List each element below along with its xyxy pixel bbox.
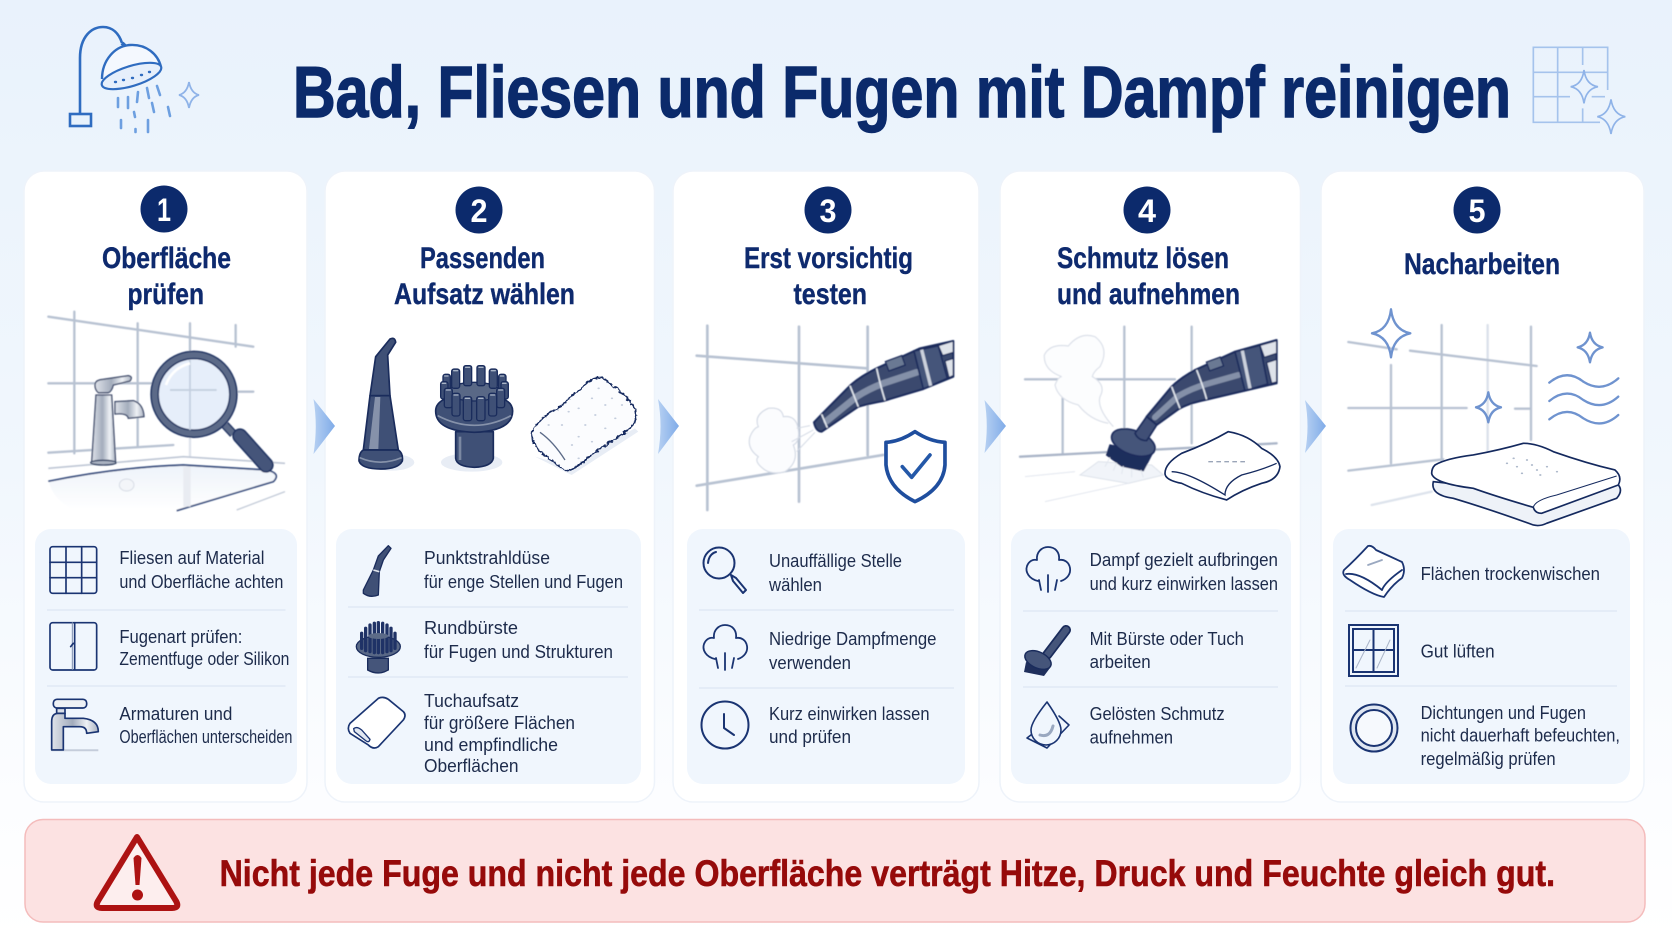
arrow: step 4 to 5	[1305, 400, 1326, 453]
step number 3: 3	[820, 193, 836, 229]
step number 3	[804, 186, 852, 234]
text: joint type: Zementfuge oder Silikon	[119, 648, 289, 669]
text: short dwell: Kurz einwirken lassen	[769, 703, 930, 724]
text: ventilate: Gut lüften	[1421, 641, 1495, 662]
icon: shower	[70, 27, 199, 132]
icon: steam cloud	[703, 625, 747, 670]
step number 1	[140, 186, 188, 232]
icon: hand brush	[1022, 630, 1066, 676]
text: apply steam	[1090, 549, 1278, 594]
text: pick up dirt: aufnehmen	[1090, 727, 1173, 748]
text: inconspicuous spot: wählen	[768, 574, 822, 595]
text: pick up dirt	[1090, 703, 1225, 748]
text: tiles: Fliesen auf Material	[119, 547, 264, 568]
illustration: clean tiles, airflow and folded towel	[1348, 309, 1620, 526]
text: round brush	[424, 617, 613, 662]
text: brush or cloth	[1090, 628, 1244, 672]
text: fittings: Armaturen und	[119, 703, 232, 724]
arrow: step 1 to 2	[314, 399, 335, 454]
text: joint type: Fugenart prüfen:	[119, 626, 242, 647]
panel: step 2	[325, 171, 654, 802]
text: tiles: und Oberfläche achten	[119, 571, 283, 592]
text: spot nozzle: Punktstrahldüse	[424, 547, 550, 568]
arrow: step 2 to 3	[658, 399, 679, 454]
arrow: step 3 to 4	[984, 400, 1006, 453]
icon: window	[1349, 625, 1398, 676]
text: cloth attachment: Oberflächen	[424, 755, 518, 776]
icon: magnifier	[704, 548, 746, 593]
icon: steam cloud	[1026, 547, 1070, 592]
warning banner	[25, 820, 1645, 922]
info panel: step 2	[336, 529, 641, 784]
heading: step 3	[744, 242, 913, 311]
heading: step 2: Passenden	[420, 242, 545, 275]
sparkles	[1372, 309, 1603, 422]
text: seals and joints	[1421, 702, 1620, 769]
heading: step 3: testen	[794, 278, 867, 311]
icon: seal ring	[1350, 704, 1398, 752]
round brush	[436, 366, 513, 467]
icon: shield	[886, 432, 945, 502]
text: wipe dry: Flächen trockenwischen	[1421, 563, 1600, 584]
text: fittings	[119, 703, 292, 747]
heading: step 1: prüfen	[128, 278, 204, 311]
step number 2	[456, 186, 502, 234]
text: short dwell	[769, 703, 930, 747]
text: round brush: für Fugen und Strukturen	[424, 641, 613, 662]
text: round brush: Rundbürste	[424, 617, 518, 638]
text: fittings: Oberflächen unterscheiden	[119, 726, 292, 747]
text: low steam: Niedrige Dampfmenge	[769, 628, 936, 649]
icon: faucet	[52, 699, 98, 750]
illustration: nozzle, brush and cloth attachments	[359, 338, 638, 475]
text: short dwell: und prüfen	[769, 726, 851, 747]
text: low steam: verwenden	[769, 652, 851, 673]
heading: step 1: Oberfläche	[102, 242, 231, 275]
illustration: faucet and magnifier	[48, 312, 285, 511]
icon: joint	[50, 623, 97, 670]
panel: step 5	[1321, 171, 1644, 802]
heading: step 2	[394, 242, 575, 311]
text: cloth attachment: für größere Flächen	[424, 712, 575, 733]
text: apply steam: Dampf gezielt aufbringen	[1090, 549, 1278, 570]
panel: step 3	[673, 171, 979, 802]
text: seals and joints: regelmäßig prüfen	[1421, 748, 1556, 769]
text: brush or cloth: arbeiten	[1090, 651, 1151, 672]
icon: round brush	[356, 623, 400, 673]
nozzle	[359, 338, 402, 469]
airflow waves	[1549, 375, 1618, 423]
text: cloth attachment: Tuchaufsatz	[424, 690, 519, 711]
heading: step 2: Aufsatz wählen	[394, 278, 575, 311]
info panel: step 4	[1011, 529, 1291, 784]
step number 4	[1124, 186, 1170, 234]
text: pick up dirt: Gelösten Schmutz	[1090, 703, 1225, 724]
heading: step 4: Schmutz lösen	[1057, 242, 1229, 275]
text: inconspicuous spot	[768, 550, 902, 595]
step number 5	[1454, 186, 1500, 234]
step number 5: 5	[1468, 193, 1486, 229]
icon: clock	[702, 702, 748, 748]
heading: step 4: und aufnehmen	[1057, 278, 1240, 311]
icon: spot nozzle	[363, 546, 391, 596]
towel	[1165, 432, 1280, 500]
icon: tile grid	[50, 547, 97, 593]
heading: step 1	[102, 242, 231, 311]
step number 4: 4	[1138, 193, 1156, 229]
info panel: step 5	[1333, 529, 1630, 784]
text: inconspicuous spot: Unauffällige Stelle	[769, 550, 902, 571]
text: spot nozzle	[424, 547, 623, 592]
text: seals and joints: nicht dauerhaft befeuchten,	[1421, 725, 1620, 746]
panel: step 4	[1000, 171, 1300, 802]
icon: warning triangle	[97, 837, 177, 908]
panel: step 1	[24, 171, 307, 802]
heading: step 5: Nacharbeiten	[1404, 248, 1560, 281]
icon: cloth attachment	[348, 697, 405, 748]
text: low steam	[769, 628, 936, 673]
step number 2: 2	[470, 193, 488, 229]
text: spot nozzle: für enge Stellen und Fugen	[424, 571, 623, 592]
icon: drop on cloth	[1027, 702, 1069, 748]
info panel: step 3	[687, 529, 965, 784]
text: brush or cloth: Mit Bürste oder Tuch	[1090, 628, 1244, 649]
icon: folded cloth	[1343, 546, 1404, 597]
text: joint type	[119, 626, 289, 669]
text: seals and joints: Dichtungen und Fugen	[1421, 702, 1586, 723]
cloth attachment	[532, 377, 636, 472]
step number 1: 1	[157, 192, 171, 228]
heading: step 3: Erst vorsichtig	[744, 242, 913, 275]
heading: step 4	[1057, 242, 1240, 311]
illustration: steam nozzle test with shield	[697, 326, 953, 510]
text: apply steam: und kurz einwirken lassen	[1090, 573, 1278, 594]
info panel: step 1	[35, 529, 297, 784]
illustration: brush nozzle, steam and towel	[1020, 327, 1280, 502]
text: cloth attachment: und empfindliche	[424, 734, 558, 755]
icon: tile grid with sparkles	[1533, 47, 1625, 134]
text: tiles	[119, 547, 283, 592]
folded towel	[1432, 443, 1620, 526]
text: cloth attachment	[424, 690, 575, 776]
